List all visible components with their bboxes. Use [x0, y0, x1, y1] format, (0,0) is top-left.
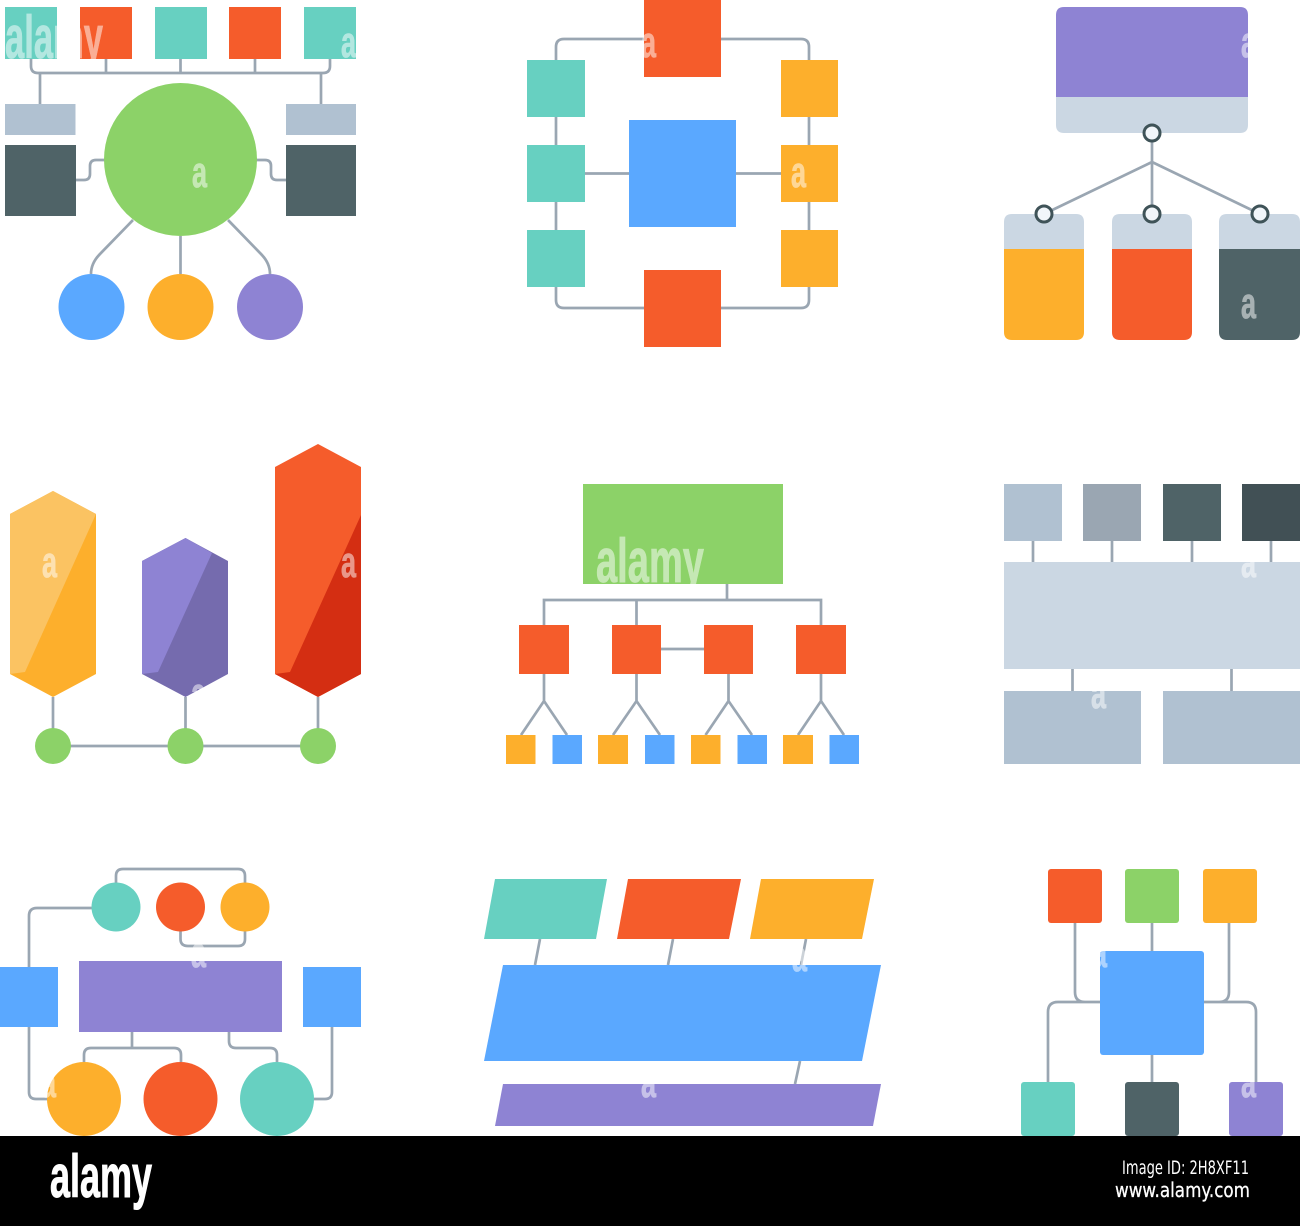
- connectors: blue hub: [1048, 923, 1256, 1082]
- watermarks: a: [1091, 669, 1106, 718]
- teal left squares: [527, 60, 585, 287]
- watermarks: a: [1241, 18, 1256, 67]
- purple hexagon bar: [142, 538, 228, 697]
- panel: grey block diagram: [1004, 484, 1300, 764]
- watermarks: a: [791, 148, 806, 197]
- watermarks: a: [191, 928, 206, 977]
- left side boxes: [5, 104, 76, 216]
- wide centre block: [1004, 562, 1300, 669]
- central green circle: [104, 83, 257, 236]
- right side boxes: [286, 104, 356, 216]
- connectors: hub diagram: [31, 59, 330, 274]
- banner logo: alamy: [50, 1143, 152, 1210]
- watermarks: a: [641, 18, 656, 67]
- green nodes: [35, 728, 336, 764]
- yellow right squares: [781, 60, 838, 287]
- large blue parallelogram: [484, 965, 881, 1061]
- watermarks: a: [1241, 538, 1256, 587]
- watermarks: a: [341, 18, 356, 67]
- bottom large circles: [47, 1062, 314, 1136]
- red card: [1112, 214, 1192, 340]
- top small circles: [92, 882, 270, 932]
- bottom squares: [1021, 1082, 1283, 1136]
- panel: top card with three cards: [1004, 7, 1300, 340]
- watermarks: a: [41, 1058, 56, 1107]
- connectors: org chart: [521, 584, 844, 735]
- bottom blocks: [1004, 691, 1300, 764]
- watermarks: a: [341, 538, 356, 587]
- watermarks: a: [192, 148, 207, 197]
- panel: blue hub with six squares: [1021, 869, 1283, 1136]
- watermarks: a: [1241, 279, 1256, 328]
- panel: circles and bars diagram: [0, 869, 361, 1136]
- header card: [1056, 7, 1248, 133]
- purple parallelogram: [495, 1084, 881, 1126]
- watermarks: a: [1092, 928, 1107, 977]
- central blue square: [1100, 951, 1204, 1055]
- top squares: [1048, 869, 1257, 923]
- panel: org chart: [506, 484, 859, 764]
- top parallelograms: [484, 879, 874, 939]
- footer banner: [0, 1136, 1300, 1226]
- connectors: ring diagram: [556, 39, 809, 308]
- connectors: circles diagram: [29, 869, 332, 1099]
- red hexagon bar: [275, 444, 361, 697]
- panel: ring diagram with blue centre: [527, 0, 838, 347]
- dark card: [1219, 214, 1300, 340]
- watermarks: a: [191, 669, 206, 718]
- watermarks: a: [42, 538, 57, 587]
- green top box: [583, 484, 783, 584]
- watermarks: a: [1241, 1058, 1256, 1107]
- connectors: card tree: [1044, 141, 1260, 214]
- watermarks: a: [792, 932, 807, 981]
- banner background: [0, 1136, 1300, 1226]
- right blue square: [303, 967, 361, 1027]
- purple centre bar: [79, 961, 282, 1032]
- panel: parallelogram diagram: [484, 879, 881, 1126]
- blue leaf boxes: [552, 735, 859, 764]
- watermarks: alamy: [596, 527, 704, 596]
- red middle boxes: [519, 625, 846, 674]
- red top and bottom squares: [644, 0, 721, 347]
- yellow hexagon bar: [10, 491, 96, 697]
- website: www.alamy.com: [1115, 1178, 1250, 1202]
- watermarks: a: [641, 1058, 656, 1107]
- top squares row: [5, 7, 356, 59]
- connector nodes: [1036, 125, 1268, 222]
- bottom circles: [58, 274, 303, 340]
- panel: hub diagram with green circle: [5, 7, 356, 340]
- yellow leaf boxes: [506, 735, 813, 764]
- connectors: hexagon bars: [53, 697, 318, 746]
- watermarks: alamy: [5, 4, 103, 71]
- connectors: parallelograms: [535, 939, 806, 1084]
- yellow card: [1004, 214, 1084, 340]
- central blue square: [629, 120, 736, 227]
- connectors: block diagram: [1033, 541, 1271, 691]
- panel: hexagon bar chart: [10, 444, 361, 764]
- left blue square: [0, 967, 58, 1027]
- top grey squares: [1004, 484, 1300, 541]
